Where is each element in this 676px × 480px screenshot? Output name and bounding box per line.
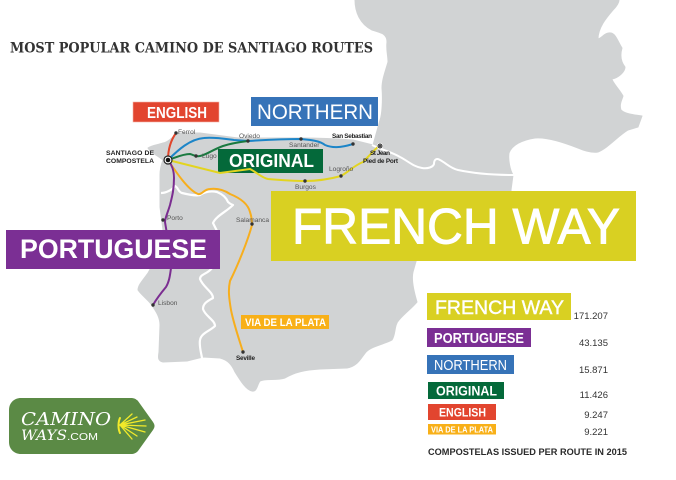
city labels	[158, 129, 354, 307]
legend row: French Way: FRENCH WAY	[435, 297, 564, 319]
legend row: French Way: 171.207	[574, 311, 608, 322]
legend row: Portuguese	[427, 328, 608, 349]
map label: Original: ORIGINAL	[229, 151, 314, 171]
map label: Original	[218, 149, 323, 173]
legend row: Portuguese: 43.135	[579, 338, 608, 349]
legend row: Original: ORIGINAL	[436, 384, 497, 398]
icon: scallop shell	[118, 414, 146, 439]
bold city labels: Seville	[236, 355, 255, 362]
route: Original	[168, 141, 248, 160]
route: Portuguese	[153, 160, 174, 305]
map label: English	[133, 102, 219, 122]
route: Via de la Plata	[168, 160, 252, 352]
city labels: Lisbon	[158, 300, 178, 307]
map: Portugal-Spain border	[161, 186, 233, 358]
map: Spain-France border	[372, 145, 514, 175]
legend row: Via de la Plata: 9.221	[584, 427, 608, 438]
legend row: English	[428, 404, 608, 421]
logo: Camino Ways: WAYS	[21, 428, 67, 444]
city labels: Porto	[167, 215, 183, 222]
title: MOST POPULAR CAMINO DE SANTIAGO ROUTES	[10, 40, 373, 56]
bold city labels: St Jean	[370, 150, 390, 157]
route: French Way	[168, 146, 379, 181]
legend row: Original	[428, 382, 608, 401]
legend row: Northern: NORTHERN	[434, 357, 507, 374]
legend: compostelas per route	[427, 293, 628, 458]
city labels: Ferrol	[178, 129, 196, 136]
legend row: Northern: 15.871	[579, 365, 608, 376]
map label: Portuguese: PORTUGUESE	[20, 234, 207, 264]
legend row: English: ENGLISH	[439, 406, 486, 420]
map label: French Way: FRENCH WAY	[292, 198, 620, 254]
logo: Camino Ways: CAMINO	[21, 409, 111, 430]
bold city labels	[236, 133, 399, 362]
legend row: Via de la Plata: VIA DE LA PLATA	[431, 424, 493, 434]
city labels: Burgos	[295, 184, 317, 191]
map: Iberia and southern France landmass	[138, 0, 642, 391]
legend row: Northern	[427, 355, 608, 376]
map label: Northern: NORTHERN	[257, 101, 373, 124]
city labels: Logroño	[329, 166, 354, 173]
map label: English: ENGLISH	[147, 105, 207, 122]
logo: Camino Ways: .COM	[67, 431, 98, 443]
legend row: Original: 11.426	[580, 390, 608, 401]
marker: Santiago de Compostela	[164, 156, 172, 164]
label: Santiago de Compostela: SANTIAGO DE	[106, 150, 154, 157]
route: English	[168, 133, 176, 160]
city labels: Oviedo	[239, 133, 260, 140]
legend caption: COMPOSTELAS ISSUED PER ROUTE IN 2015	[428, 447, 628, 458]
label: Santiago de Compostela: COMPOSTELA	[106, 158, 154, 165]
label: Santiago de Compostela	[106, 150, 154, 165]
bold city labels: Pied de Port	[363, 158, 399, 165]
city labels: Santander	[289, 142, 320, 149]
city labels: Salamanca	[236, 217, 269, 224]
map label: Portuguese	[6, 230, 220, 269]
city markers	[151, 131, 355, 354]
map label: Via de la Plata: VIA DE LA PLATA	[245, 317, 326, 329]
legend row: Via de la Plata	[428, 424, 608, 438]
city labels: Lugo	[202, 153, 217, 160]
legend row: English: 9.247	[584, 410, 608, 421]
bold city labels: San Sebastian	[332, 133, 372, 140]
legend row: French Way	[427, 293, 608, 322]
route: Northern	[168, 138, 353, 160]
logo: Camino Ways	[9, 398, 154, 454]
marker: St Jean Pied de Port	[377, 143, 383, 149]
legend row: Portuguese: PORTUGUESE	[434, 330, 524, 347]
